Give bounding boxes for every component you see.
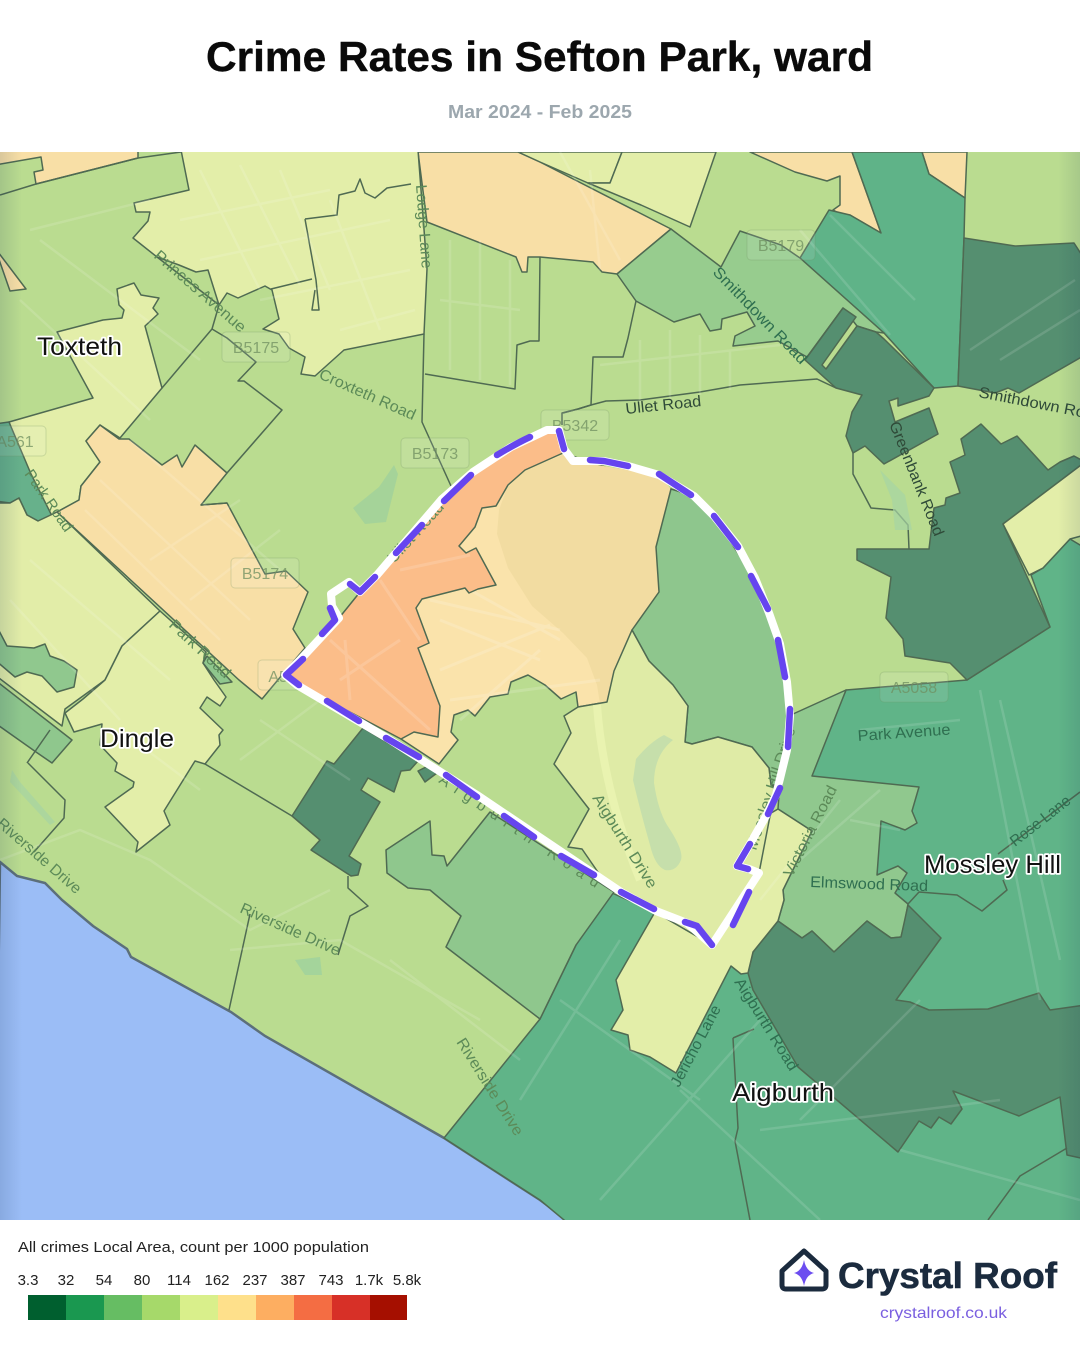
website: crystalroof.co.uk	[880, 1305, 1008, 1322]
park peach area	[497, 455, 671, 704]
legend tick values: 743	[318, 1272, 344, 1289]
road labels: Greenbank Road	[885, 419, 947, 539]
road labels: Princes Avenue	[150, 247, 249, 336]
Dingle pale yellow district	[65, 611, 226, 852]
legend	[18, 1239, 422, 1320]
internal ward boundaries and streets	[0, 152, 1080, 1220]
legend tick values: 162	[204, 1272, 230, 1289]
title: Crime Rates in Sefton Park, ward	[206, 33, 873, 80]
top green district	[800, 152, 965, 388]
road number shields: B5342	[552, 418, 598, 435]
legend tick values: 54	[96, 1272, 112, 1289]
road labels: Aigburth Road	[731, 975, 801, 1074]
road number shields: B5174	[242, 566, 288, 583]
subtitle: date range: Mar 2024 - Feb 2025	[448, 102, 632, 122]
Sefton Park lake	[633, 735, 681, 870]
south-east green district	[444, 539, 1080, 1225]
panel: Sefton Park ward	[287, 430, 799, 945]
road label: Ullet Road under boundary: Ullet Road	[384, 499, 448, 567]
place labels: Mossley Hill	[924, 851, 1061, 879]
road labels: Smithdown Ro	[977, 384, 1080, 422]
lake: Princes and Otterspool Parks	[353, 465, 398, 524]
icon: house with star	[782, 1251, 826, 1289]
road number shields	[0, 230, 948, 702]
central peach district	[400, 453, 671, 764]
legend tick values: 80	[134, 1272, 150, 1289]
legend tick values: 32	[58, 1272, 74, 1289]
park medium green area	[632, 489, 790, 785]
road labels: Park Road	[21, 467, 76, 535]
road labels: Ullet Road	[625, 393, 702, 418]
place labels: Dingle	[100, 725, 174, 753]
Sefton Park pale yellow area	[554, 630, 780, 945]
road labels: Victoria Road	[780, 783, 841, 880]
road labels: Rose Lane	[1007, 792, 1074, 850]
legend title: All crimes Local Area, count per 1000 population	[18, 1239, 369, 1256]
Toxteth pale yellow district	[9, 283, 162, 521]
road labels: Elmswood Road	[810, 874, 928, 895]
road labels	[0, 184, 1080, 1139]
road labels: Smithdown Road	[709, 264, 810, 368]
Toxteth north pale yellow district	[133, 150, 427, 376]
road labels: Riverside Drive	[453, 1035, 526, 1139]
choropleth map	[0, 150, 1080, 1225]
place labels	[37, 333, 1061, 1107]
road labels: Riverside Drive	[237, 900, 343, 960]
water features	[10, 465, 912, 975]
district areas	[0, 150, 1080, 1225]
west peach district	[57, 425, 308, 699]
legend tick values: 5.8k	[393, 1272, 422, 1289]
road label: Mossley Hill Drive: Mossley Hill Drive	[744, 725, 799, 852]
road number shields: B5173	[412, 446, 458, 463]
south dark green block	[292, 728, 418, 876]
road labels: Park Road	[165, 616, 234, 682]
road labels: Croxteth Road	[316, 366, 418, 424]
east dark green block	[958, 238, 1080, 393]
south dark green district	[748, 905, 1080, 1159]
road number shields: B5175	[233, 340, 279, 357]
orange high crime district	[287, 430, 563, 739]
road labels: Jericho Lane	[668, 1002, 725, 1090]
south pale yellow district	[611, 809, 812, 1073]
logo	[782, 1251, 1058, 1322]
road label: Aigburth Road under boundary: Aigburth Road	[436, 771, 603, 892]
legend tick values	[18, 1272, 422, 1289]
legend tick values: 387	[280, 1272, 306, 1289]
west medium green districts	[0, 623, 77, 692]
legend tick values: 3.3	[18, 1272, 38, 1289]
ward boundary white line	[285, 430, 790, 945]
legend tick values: 1.7k	[355, 1272, 384, 1289]
place labels: Toxteth	[37, 333, 122, 361]
north pale yellow districts	[518, 152, 622, 183]
Elmswood medium green district	[778, 690, 919, 952]
Smithdown medium green district	[617, 229, 884, 357]
top-left peach district	[0, 150, 138, 184]
Wavertree dark green district	[857, 424, 1080, 680]
legend colour scale	[28, 1295, 407, 1320]
legend tick values: 114	[167, 1272, 191, 1289]
road number shields: B5179	[758, 238, 804, 255]
south medium green district	[386, 812, 614, 1019]
brand name: Crystal Roof	[838, 1255, 1058, 1296]
south-west pale yellow district	[0, 498, 160, 726]
Aigburth Drive pale road band	[597, 705, 640, 880]
A561 green district	[0, 422, 53, 521]
north peach district	[418, 152, 671, 274]
ward boundary purple dashes	[286, 431, 790, 945]
road number shields: A561	[268, 669, 306, 686]
road labels: Park Avenue	[857, 722, 951, 745]
map base	[0, 152, 1080, 1220]
Smithdown dark green district	[805, 308, 938, 464]
road number shields: A5058	[891, 680, 937, 697]
sea	[0, 862, 570, 1222]
road labels: Lodge Lane	[412, 184, 435, 269]
north-east peach districts	[750, 152, 881, 233]
place labels: Aigburth	[732, 1079, 834, 1107]
legend tick values: 237	[242, 1272, 268, 1289]
road label: Aigburth Drive: Aigburth Drive	[589, 791, 660, 892]
east pale yellow district	[1003, 462, 1080, 575]
map edge shading	[0, 152, 1080, 1220]
